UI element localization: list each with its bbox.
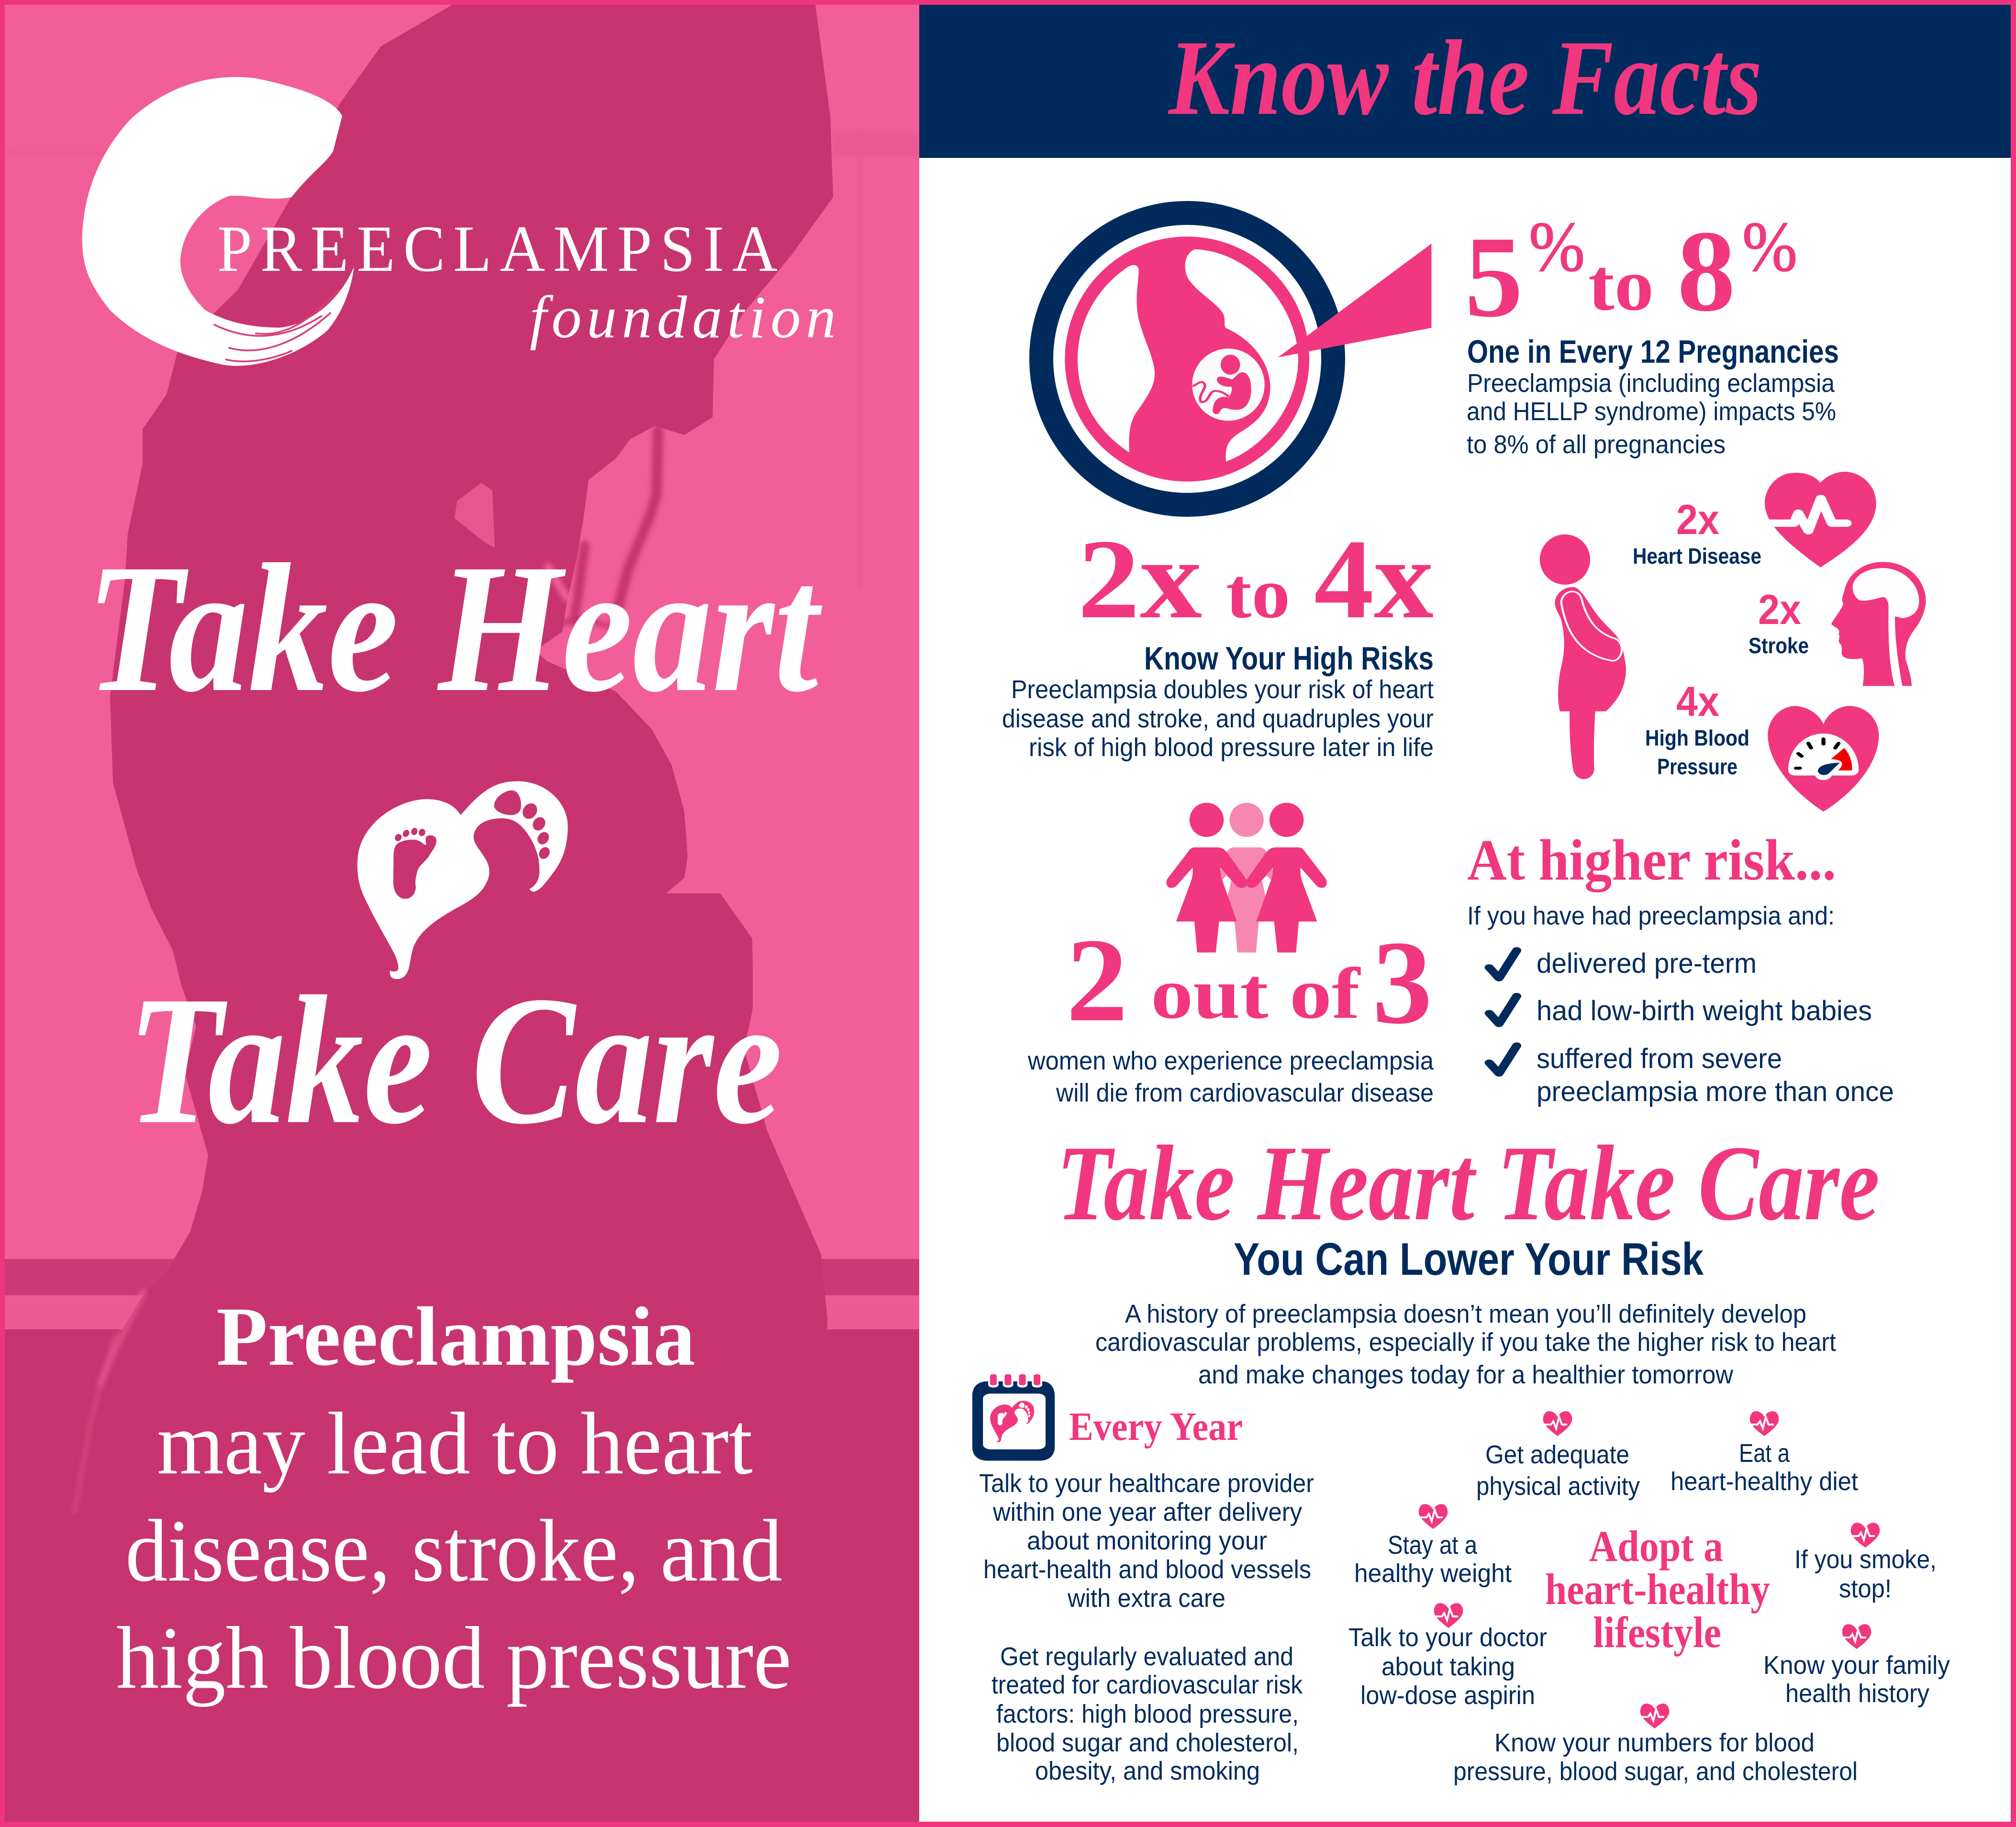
text block: history paragraph: and make changes today for a healthier tomorrow: [1198, 1360, 1734, 1389]
text block: one in every 12: Preeclampsia (including eclampsia: [1467, 369, 1835, 398]
stat: 2 out of 3: 3: [1372, 916, 1432, 1049]
label: 2x stroke: [1749, 586, 1809, 658]
tip: stop smoking: [1794, 1523, 1937, 1603]
text block: get evaluated: factors: high blood pressure,: [996, 1700, 1299, 1728]
label: 4x high blood pressure: 4x: [1676, 678, 1719, 725]
checklist: delivered pre-term: [1537, 948, 1757, 979]
tip: adequate activity: Get adequate: [1485, 1440, 1629, 1469]
logo brush circle: [82, 77, 354, 366]
icon: heart with pulse: [1765, 472, 1876, 568]
panel: left photo background: [0, 0, 919, 1827]
stat: 5% to 8%: %: [1529, 208, 1585, 286]
heading: Every Year: Every Year: [1069, 1404, 1243, 1449]
stat: 2x to 4x: [1078, 516, 1434, 642]
text block: history paragraph: cardiovascular problems, especially if you take the higher risk to heart: [1095, 1328, 1836, 1357]
stat: 5% to 8%: 5: [1465, 212, 1523, 341]
tip: healthy weight: Stay at a: [1388, 1531, 1478, 1560]
text block: preeclampsia statement: [116, 1290, 791, 1707]
tip: family history: [1763, 1624, 1950, 1708]
tip: family history: health history: [1785, 1679, 1929, 1708]
heading: Take Heart: Take Heart: [86, 526, 824, 730]
icon: three women: [1166, 803, 1327, 953]
tip: healthy weight: [1354, 1504, 1512, 1588]
tip: know your numbers: pressure, blood sugar, and cholesterol: [1453, 1757, 1858, 1786]
tip: heart-healthy diet: Eat a: [1739, 1439, 1790, 1468]
label: 4x high blood pressure: Pressure: [1657, 754, 1738, 779]
text block: talk to provider: Talk to your healthcare provider: [979, 1469, 1314, 1498]
heading: adopt a heart-healthy lifestyle: Adopt a: [1589, 1522, 1723, 1571]
heading: Take Heart Take Care: Take Heart Take Care: [1057, 1123, 1880, 1243]
subheading: You Can Lower Your Risk: You Can Lower Your Risk: [1234, 1234, 1704, 1285]
stat: 2 out of 3: [1066, 914, 1432, 1049]
text block: talk to provider: within one year after delivery: [992, 1498, 1302, 1526]
tip: aspirin: about taking: [1381, 1652, 1515, 1681]
checklist: [1489, 948, 1894, 1107]
tip: adequate activity: physical activity: [1476, 1472, 1640, 1501]
text block: preeclampsia statement: high blood pressure: [116, 1609, 791, 1707]
tip: family history: Know your family: [1763, 1651, 1950, 1680]
text block: get evaluated: blood sugar and cholesterol,: [996, 1728, 1299, 1757]
icon: heart with gauge: [1768, 706, 1879, 812]
icons: checkmarks: [1489, 950, 1517, 1073]
label: 2x stroke: Stroke: [1749, 633, 1809, 658]
logo wordmark: [217, 212, 836, 351]
label: 2x heart disease: [1633, 496, 1761, 568]
icon: head with brain: [1831, 562, 1926, 686]
tip: aspirin: [1348, 1603, 1547, 1710]
stat: 5% to 8%: %: [1742, 208, 1797, 286]
label: 2x heart disease: 2x: [1676, 496, 1719, 543]
text block: get evaluated: [991, 1642, 1303, 1785]
icon group: risks: [1540, 472, 1926, 812]
text block: high risks: Know Your High Risks: [1144, 640, 1434, 677]
checklist: suffered from severe: [1537, 1043, 1782, 1074]
text block: one in every 12: [1467, 334, 1839, 459]
heading: adopt a heart-healthy lifestyle: heart-healthy: [1545, 1565, 1770, 1614]
text block: one in every 12: and HELLP syndrome) impacts 5%: [1467, 397, 1836, 426]
icon: pregnancy target: [1041, 213, 1431, 505]
checklist: preeclampsia more than once: [1537, 1076, 1894, 1107]
label: 4x high blood pressure: High Blood: [1645, 725, 1749, 750]
icon: pregnant figure: [1540, 535, 1626, 779]
stat: 5% to 8%: 8: [1677, 206, 1735, 335]
tip: aspirin: low-dose aspirin: [1360, 1681, 1535, 1710]
label: 2x stroke: 2x: [1758, 586, 1801, 633]
stat: 5% to 8%: [1465, 206, 1797, 341]
text block: high risks: Preeclampsia doubles your risk of heart: [1011, 675, 1434, 704]
text block: high risks: risk of high blood pressure later in life: [1029, 733, 1434, 762]
text block: one in every 12: to 8% of all pregnancies: [1467, 430, 1726, 459]
text block: preeclampsia statement: disease, stroke, and: [125, 1502, 782, 1600]
tip: adequate activity: [1476, 1411, 1640, 1501]
text block: get evaluated: obesity, and smoking: [1035, 1757, 1260, 1785]
tip: aspirin: Talk to your doctor: [1348, 1623, 1547, 1652]
heading: at higher risk: At higher risk...: [1467, 828, 1836, 892]
stat: 2x to 4x: to: [1226, 554, 1290, 633]
tip: know your numbers: Know your numbers for blood: [1494, 1728, 1815, 1757]
tip: stop smoking: stop!: [1839, 1574, 1892, 1603]
tip: heart-healthy diet: heart-healthy diet: [1671, 1467, 1858, 1496]
label: 2x heart disease: Heart Disease: [1633, 544, 1761, 568]
heading: Know the Facts: Know the Facts: [1168, 18, 1762, 137]
checklist: had low-birth weight babies: [1537, 995, 1872, 1026]
hair strands: [541, 431, 658, 636]
stat: 2 out of 3: 2: [1066, 914, 1128, 1047]
text block: one in every 12: One in Every 12 Pregnancies: [1467, 334, 1839, 370]
heading: Take Care: Take Care: [127, 958, 782, 1162]
heading: adopt a heart-healthy lifestyle: lifestyle: [1593, 1608, 1721, 1657]
header band: [919, 5, 2011, 158]
tip: know your numbers: [1453, 1704, 1858, 1786]
text block: talk to provider: heart-health and blood vessels: [983, 1555, 1311, 1584]
text block: talk to provider: with extra care: [1067, 1584, 1225, 1613]
silhouette of pregnant woman: [110, 5, 833, 1335]
text block: history paragraph: [1095, 1300, 1836, 1389]
text block: get evaluated: treated for cardiovascular risk: [991, 1671, 1303, 1699]
stat: 5% to 8%: to: [1588, 244, 1654, 326]
text block: women who experience: will die from cardiovascular disease: [1056, 1079, 1434, 1107]
text block: high risks: [1002, 640, 1434, 762]
tip: stop smoking: If you smoke,: [1794, 1545, 1937, 1574]
logo wordmark: foundation: [530, 284, 836, 351]
text block: women who experience: women who experience preeclampsia: [1027, 1047, 1434, 1075]
stat: 2x to 4x: 2x: [1078, 516, 1202, 642]
stat: 2x to 4x: 4x: [1314, 516, 1434, 642]
tip: heart-healthy diet: [1671, 1411, 1858, 1496]
text block: get evaluated: Get regularly evaluated and: [1000, 1642, 1293, 1671]
ear: [455, 483, 495, 548]
text block: high risks: disease and stroke, and quadruples your: [1002, 704, 1434, 733]
text: intro: If you have had preeclampsia and:: [1467, 902, 1835, 930]
text block: history paragraph: A history of preeclampsia doesn’t mean you’ll definitely develop: [1125, 1300, 1806, 1328]
tip: healthy weight: healthy weight: [1354, 1559, 1512, 1588]
icon: calendar: [972, 1374, 1055, 1460]
icon: heart with footprints: [357, 781, 568, 979]
text block: preeclampsia statement: may lead to heart: [157, 1394, 753, 1493]
heading: adopt a heart-healthy lifestyle: [1545, 1522, 1770, 1657]
text block: talk to provider: [979, 1469, 1314, 1613]
label: 4x high blood pressure: [1645, 678, 1749, 779]
text block: talk to provider: about monitoring your: [1027, 1526, 1267, 1555]
panel: right background: [919, 0, 2016, 1827]
text block: women who experience: [1027, 1047, 1434, 1107]
text block: preeclampsia statement: Preeclampsia: [216, 1290, 695, 1383]
stat: 2 out of 3: out of: [1151, 953, 1361, 1034]
logo wordmark: PREECLAMPSIA: [217, 212, 786, 285]
